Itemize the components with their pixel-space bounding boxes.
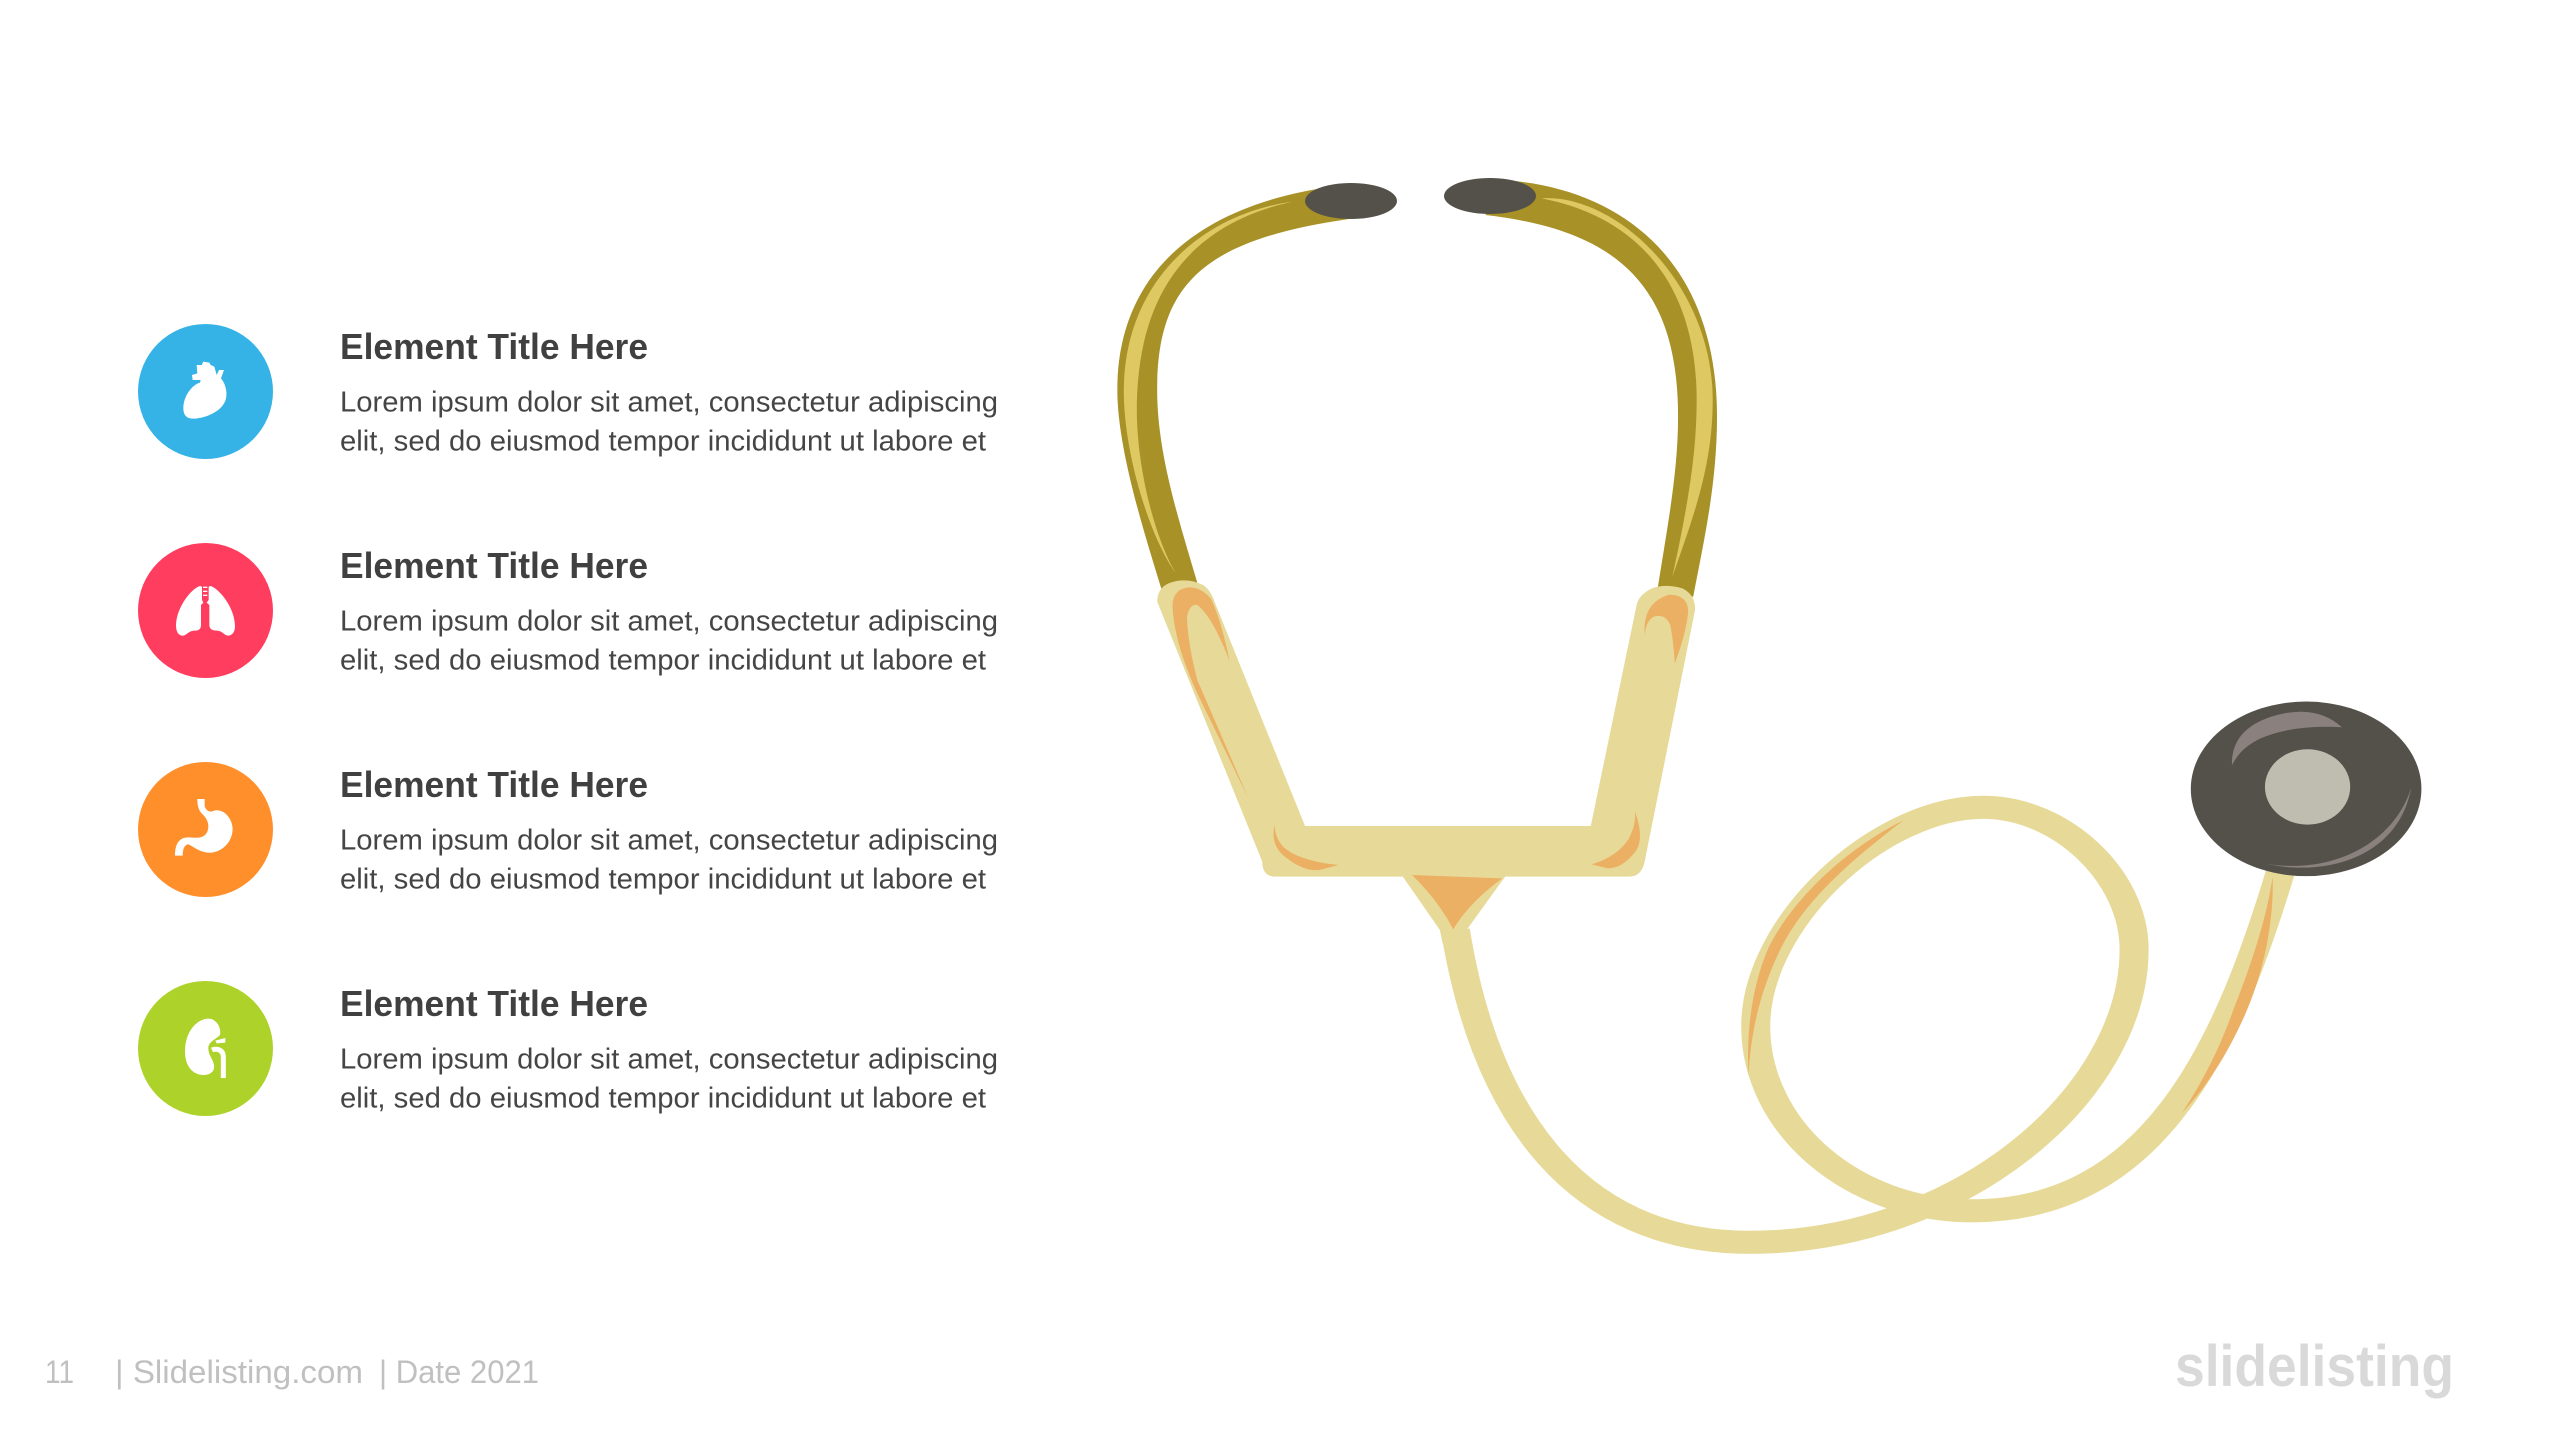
item 1 body: Lorem ipsum dolor sit amet, consectetur adipiscing — [340, 386, 998, 418]
item 2 body: Lorem ipsum dolor sit amet, consectetur adipiscing — [340, 606, 998, 638]
tube shading: loop — [1748, 820, 1903, 1076]
tube shading: lower right — [2182, 876, 2273, 1113]
list item 1: heart — [138, 324, 998, 459]
item 4 title: Element Title Here — [340, 983, 648, 1024]
item 1 body: elit, sed do eiusmod tempor incididunt ut labore et — [340, 426, 986, 458]
item 3 body: Lorem ipsum dolor sit amet, consectetur adipiscing — [340, 824, 998, 856]
ear tubes — [1117, 181, 1717, 597]
item 3 body: elit, sed do eiusmod tempor incididunt ut labore et — [340, 864, 986, 896]
item 4 body: Lorem ipsum dolor sit amet, consectetur adipiscing — [340, 1044, 998, 1076]
item 3 body — [340, 824, 998, 896]
list item 2: lungs — [138, 543, 998, 678]
item 1 body — [340, 386, 998, 458]
item 3 title: Element Title Here — [340, 764, 648, 805]
icon: kidney — [138, 981, 273, 1116]
stethoscope illustration — [1117, 178, 2421, 1242]
ear tip left — [1305, 183, 1397, 219]
footer site text: | Slidelisting.com — [115, 1354, 363, 1390]
list item 3: stomach — [138, 762, 998, 897]
yoke — [1157, 580, 1695, 943]
icon: heart — [138, 324, 273, 459]
icon: lungs — [138, 543, 273, 678]
footer page number: 11 — [45, 1354, 74, 1390]
item 2 title: Element Title Here — [340, 545, 648, 586]
ear tip right — [1444, 178, 1536, 214]
item 4 body — [340, 1044, 998, 1114]
item 4 body: elit, sed do eiusmod tempor incididunt ut labore et — [340, 1082, 986, 1114]
watermark logo: slidelisting — [2175, 1334, 2454, 1399]
tube from yoke through loop to chest piece — [1455, 807, 2284, 1242]
item 1 title: Element Title Here — [340, 326, 648, 367]
list item 4: kidney — [138, 981, 998, 1116]
footer date text: | Date 2021 — [379, 1354, 539, 1390]
icon: stomach — [138, 762, 273, 897]
chest piece — [2191, 702, 2421, 876]
item 2 body: elit, sed do eiusmod tempor incididunt ut labore et — [340, 644, 986, 676]
item 2 body — [340, 606, 998, 676]
